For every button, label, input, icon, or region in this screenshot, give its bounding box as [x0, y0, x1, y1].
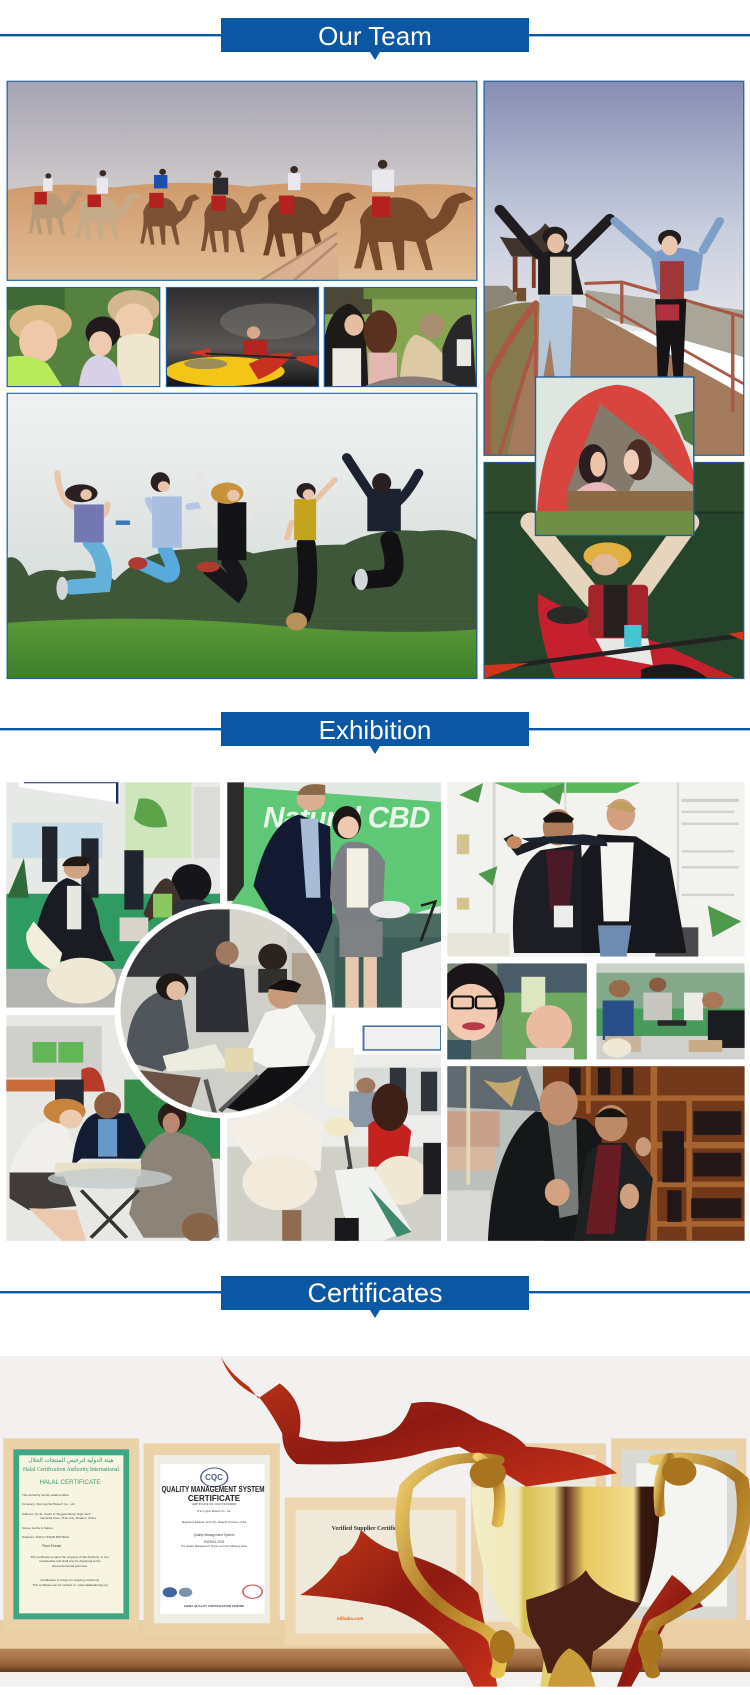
- section header: Exhibition: [0, 712, 750, 754]
- photo: man and woman in front of a Natural CBD board: [227, 782, 441, 1008]
- trophy base: [548, 1648, 595, 1687]
- shelf: [0, 1620, 750, 1672]
- panel: certificates background with shelf and frames: [0, 1356, 750, 1687]
- photo: kayak in a cave: [165, 287, 319, 387]
- certificate wording: CHINA QUALITY CERTIFICATION CENTRE: [184, 1604, 244, 1608]
- section header: Our Team: [0, 18, 750, 60]
- certificate wording: Scope: Herbs & Spices: [22, 1526, 53, 1530]
- certificate wording: Registered Address: Xi'an City, Shaanxi Province, China: [182, 1520, 247, 1524]
- photo: man in white talking with woman in red: [227, 1015, 441, 1241]
- frame: quality management certificate: [143, 1443, 280, 1635]
- trophy handles: [402, 1457, 744, 1673]
- certificate wording: CERTIFICATE: [188, 1494, 241, 1503]
- certificate wording: Certification is subject to ongoing conformity.: [40, 1578, 100, 1582]
- section header: Our Team: Our Team: [318, 21, 432, 51]
- photo: man and woman in front of a Natural CBD board: Natural CBD: [263, 801, 430, 834]
- certificate wording: This certificate remains the property of this Authority, is non-: [30, 1555, 110, 1559]
- frame: halal certificate: [3, 1438, 139, 1630]
- photo: meeting at a glass table: [6, 1015, 220, 1243]
- photo: two women inside a red tent: [535, 377, 694, 536]
- certificate wording: [22, 1458, 405, 1621]
- certificate wording: ISO9001:2015: [204, 1540, 225, 1544]
- certificate wording: Company: Xian Lyphar Biotech Co., Ltd: [22, 1502, 75, 1506]
- certificate wording: abovementioned premises.: [52, 1564, 88, 1568]
- photo: camel ride in the desert: [7, 81, 477, 280]
- certificate wording: transferable and shall only be displayed at the: [39, 1559, 101, 1563]
- certificate wording: Address: No.11, South of Tangyan Road, High-Tech: [22, 1512, 91, 1516]
- trophy with red ribbon: [0, 1357, 750, 1694]
- photo: seated visitor at a green booth: [6, 782, 220, 1008]
- photo: three women in hats: [7, 287, 160, 387]
- photo: round inset of a business meeting: [114, 903, 335, 1119]
- handle scroll ornaments: [470, 1458, 696, 1663]
- certificate wording: QUALITY MANAGEMENT SYSTEM: [162, 1485, 265, 1494]
- certificate wording: This certificate can be verified on: www.halalauthority.org: [32, 1583, 108, 1587]
- frame: certificate behind the trophy: [471, 1443, 606, 1633]
- trophy cup: [471, 1487, 660, 1687]
- section header: Certificates: [0, 1276, 750, 1318]
- certificate wording: This Authority hereby Halal certifies: [22, 1493, 70, 1497]
- section header: Exhibition: Exhibition: [319, 715, 431, 745]
- panel: our team photo collage: [7, 81, 744, 679]
- certificate wording: Xi'an Lyphar Biotech Co., Ltd.: [197, 1509, 231, 1513]
- certificate wording: Halal Certification Authority International: [23, 1466, 119, 1473]
- photo: visitors seated at a low table: [596, 963, 745, 1059]
- section header: Certificates: Certificates: [307, 1278, 443, 1308]
- photo: five people jumping on a green field: [7, 393, 477, 679]
- certificate wording: Verified Supplier Certificate: [332, 1526, 405, 1532]
- certificate wording: هيئة الدولية لترخيص المنتجات الحلال: [29, 1458, 114, 1464]
- dark reflection inside the cup: [526, 1570, 641, 1673]
- certificate wording: Alibaba.com: [337, 1616, 363, 1621]
- photo: two men at the bamboo CBD booth: [447, 782, 745, 957]
- photo: group picnic on the grass: [324, 287, 476, 387]
- certificate wording: Industrial Zone, Xi'an City, Shaanxi, China: [40, 1516, 96, 1520]
- frame: verified supplier certificate: [285, 1497, 465, 1645]
- photo: two men in front of wine shelves: [447, 1066, 745, 1241]
- photo: two women with raised arms on a hilltop path: [484, 81, 744, 455]
- certificate wording: CERTIFICATE NO. 00117Q30719R0M: [192, 1502, 236, 1506]
- certificate wording: CQC: [205, 1473, 223, 1482]
- frame: certificate at the right edge: [611, 1438, 746, 1623]
- photo: woman in a red kayak on dark water: [484, 462, 744, 679]
- certificate wording: Products: XIAN LYPHAR BIOTECH: [22, 1535, 69, 1539]
- certificate wording: Plant Extract: [42, 1544, 61, 1548]
- photo: selfie of a woman and a man: [438, 963, 587, 1060]
- certificate wording: HALAL CERTIFICATE: [39, 1479, 101, 1486]
- certificate wording: The Quality Management System is in the following areas: [181, 1544, 248, 1548]
- photo frame borders: [7, 81, 744, 679]
- red ribbon: [221, 1357, 703, 1687]
- certificate wording: Quality Management System: [194, 1533, 235, 1537]
- panel: exhibition photo collage: [6, 782, 745, 1243]
